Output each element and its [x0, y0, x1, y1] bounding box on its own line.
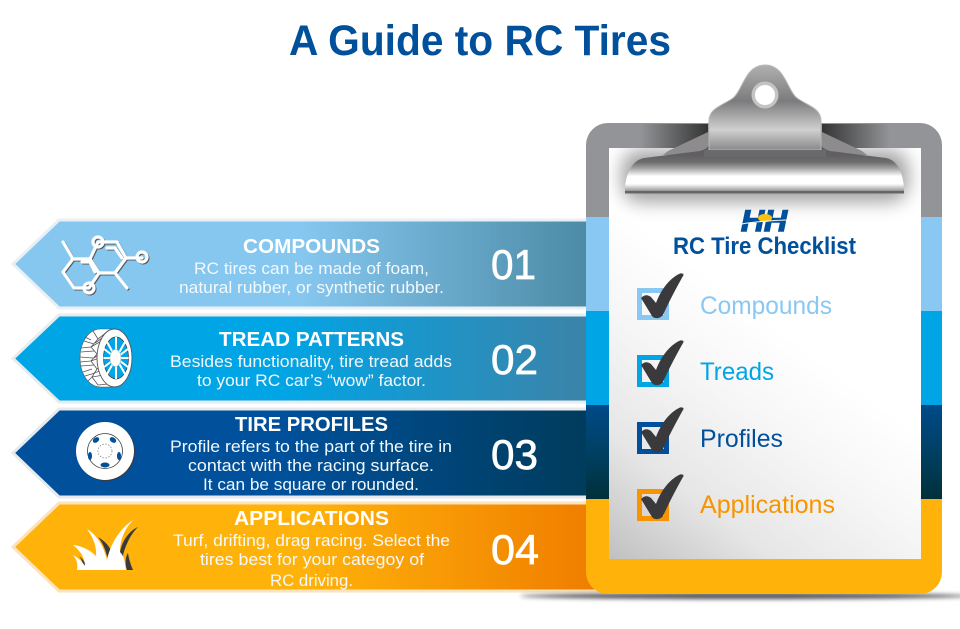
panel: tread patterns [13, 315, 600, 402]
clipboard shadow [520, 593, 960, 599]
logo: HH [741, 205, 788, 238]
panel: tire profiles [13, 409, 600, 497]
icon: grass [73, 520, 138, 570]
icon: tire [80, 329, 132, 387]
text: tread description: Besides functionality, tire tread adds [170, 353, 452, 371]
panel: applications [13, 503, 600, 591]
checklist item: compounds: Compounds [700, 292, 832, 320]
text: compounds description: natural rubber, or synthetic rubber. [179, 279, 444, 297]
clip shadow on board, right [822, 124, 890, 148]
text: applications description: tires best for your categoy of [200, 551, 424, 569]
checklist item: profiles [640, 407, 783, 453]
metal clip [625, 65, 904, 194]
checklist item: compounds [640, 273, 832, 320]
heading: compounds: COMPOUNDS [243, 236, 380, 258]
clipboard paper [609, 148, 921, 559]
icon: wheel [76, 422, 135, 481]
title: A Guide to RC Tires [289, 17, 671, 65]
text: profiles description: Profile refers to the part of the tire in [170, 438, 452, 456]
heading: applications: APPLICATIONS [234, 508, 389, 530]
text: tread description: to your RC car’s “wow” factor. [197, 372, 426, 390]
text: profiles description: It can be square or rounded. [203, 476, 419, 494]
clip hole [752, 82, 778, 108]
checklist title: RC Tire Checklist [673, 233, 856, 260]
heading: tread patterns: TREAD PATTERNS [219, 329, 404, 351]
text: compounds description: RC tires can be made of foam, [194, 260, 429, 278]
number: 03: 03 [491, 431, 538, 478]
clip shadow on board [640, 124, 708, 148]
clipboard board [586, 123, 942, 594]
clipboard [520, 65, 960, 599]
heading: tire profiles: TIRE PROFILES [235, 414, 388, 436]
checklist item: applications [640, 474, 835, 519]
text: applications description: RC driving. [270, 572, 353, 590]
number: 01: 01 [491, 241, 536, 288]
checklist item: treads: Treads [700, 358, 774, 386]
text: applications description: Turf, drifting, drag racing. Select the [173, 532, 450, 550]
text: profiles description: contact with the racing surface. [188, 457, 434, 475]
checklist item: applications: Applications [700, 491, 835, 519]
checklist item: profiles: Profiles [700, 425, 783, 453]
number: 04: 04 [491, 526, 539, 573]
panel: compounds [13, 220, 600, 308]
icon: molecule [63, 237, 148, 294]
checklist item: treads [640, 340, 774, 386]
number: 02: 02 [491, 336, 538, 383]
